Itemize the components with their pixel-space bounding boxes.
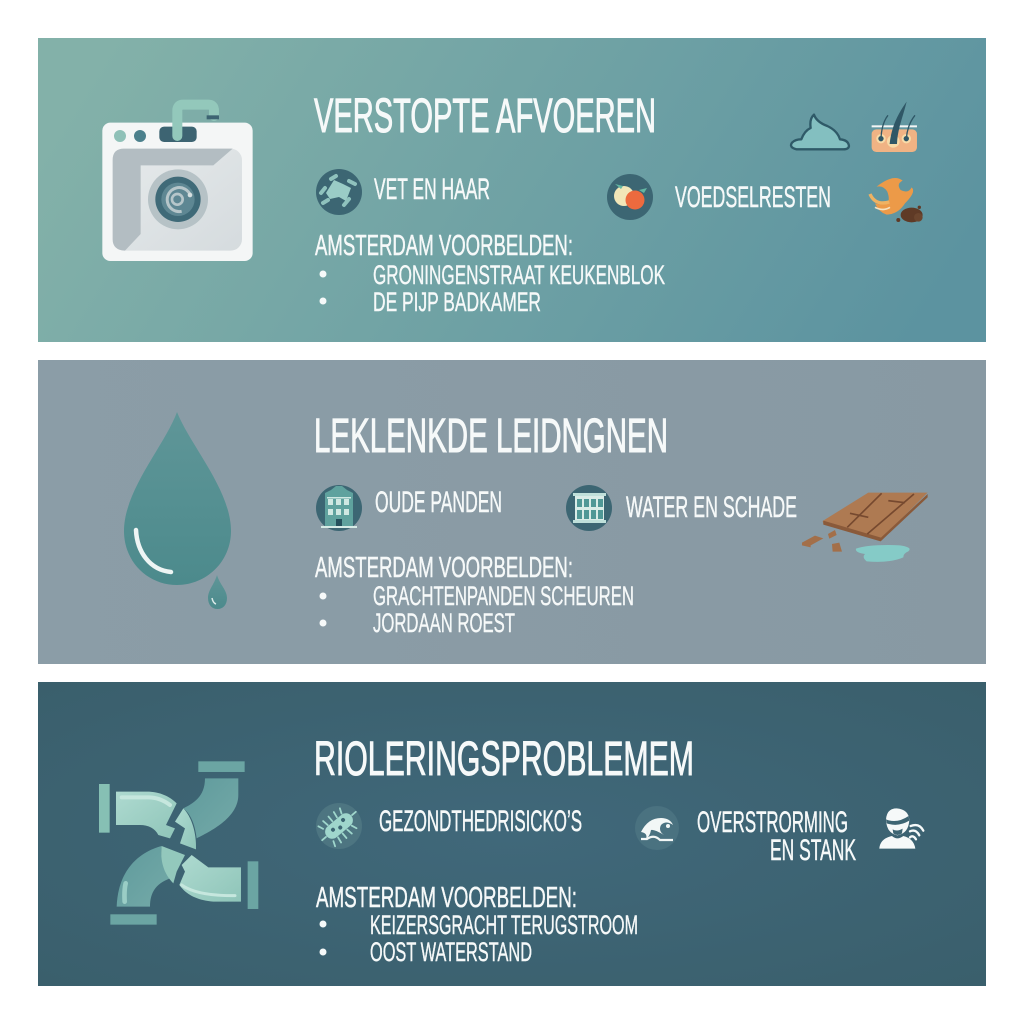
icon: damaged wood floor [802, 493, 928, 562]
bullet list [320, 260, 665, 317]
panel: lekkende leidingen [38, 360, 986, 664]
icon: building facade [566, 485, 612, 531]
heading: LEKLENKDE LEIDNGNEN [314, 410, 668, 463]
bullet list: OOST WATERSTAND [370, 937, 532, 967]
bullet list: GRONINGENSTRAAT KEUKENBLOK [373, 260, 665, 290]
examples heading: AMSTERDAM VOORBELDEN: [315, 552, 573, 584]
panel: verstopte afvoeren [38, 38, 986, 342]
icon: old building [316, 485, 362, 531]
bullet list: JORDAAN ROEST [373, 608, 515, 638]
label: overstroming en stank [697, 806, 856, 867]
examples heading: AMSTERDAM VOORBELDEN: [315, 230, 573, 262]
label: voedselresten: VOEDSELRESTEN [675, 181, 831, 214]
label: gezondheidsrisico's: GEZONDTHEDRISICKO’S [379, 805, 582, 838]
icon: broken pipes [99, 761, 258, 925]
icon: water drop [124, 412, 231, 609]
panel: rioleringsproblemen [38, 682, 986, 986]
icon: food scraps [870, 178, 923, 222]
bullet list: GRACHTENPANDEN SCHEUREN [373, 581, 634, 611]
bullet list: KEIZERSGRACHT TERUGSTROOM [370, 910, 638, 940]
icon: sink [102, 105, 253, 261]
label: oude panden: OUDE PANDEN [375, 486, 502, 519]
icon: hair follicles [872, 102, 917, 152]
label: overstroming en stank: EN STANK [770, 834, 856, 867]
icon: food circle [607, 174, 653, 220]
heading: RIOLERINGSPROBLEMEM [314, 733, 694, 786]
icon: grease blob [791, 115, 849, 149]
bullet list: DE PIJP BADKAMER [373, 287, 541, 317]
icon: bacteria [313, 801, 365, 851]
examples heading: AMSTERDAM VOORBELDEN: [316, 882, 577, 914]
label: vet en haar: VET EN HAAR [374, 173, 490, 206]
icon: person smelling odour [879, 808, 923, 849]
bullet list [320, 581, 634, 638]
label: water en schade: WATER EN SCHADE [626, 491, 797, 524]
icon: fat and hair circle [316, 169, 362, 215]
heading: VERSTOPTE AFVOEREN [314, 90, 656, 143]
bullet list [320, 910, 638, 967]
label: overstroming en stank: OVERSTRORMING [697, 806, 848, 839]
icon: wave [635, 806, 679, 850]
